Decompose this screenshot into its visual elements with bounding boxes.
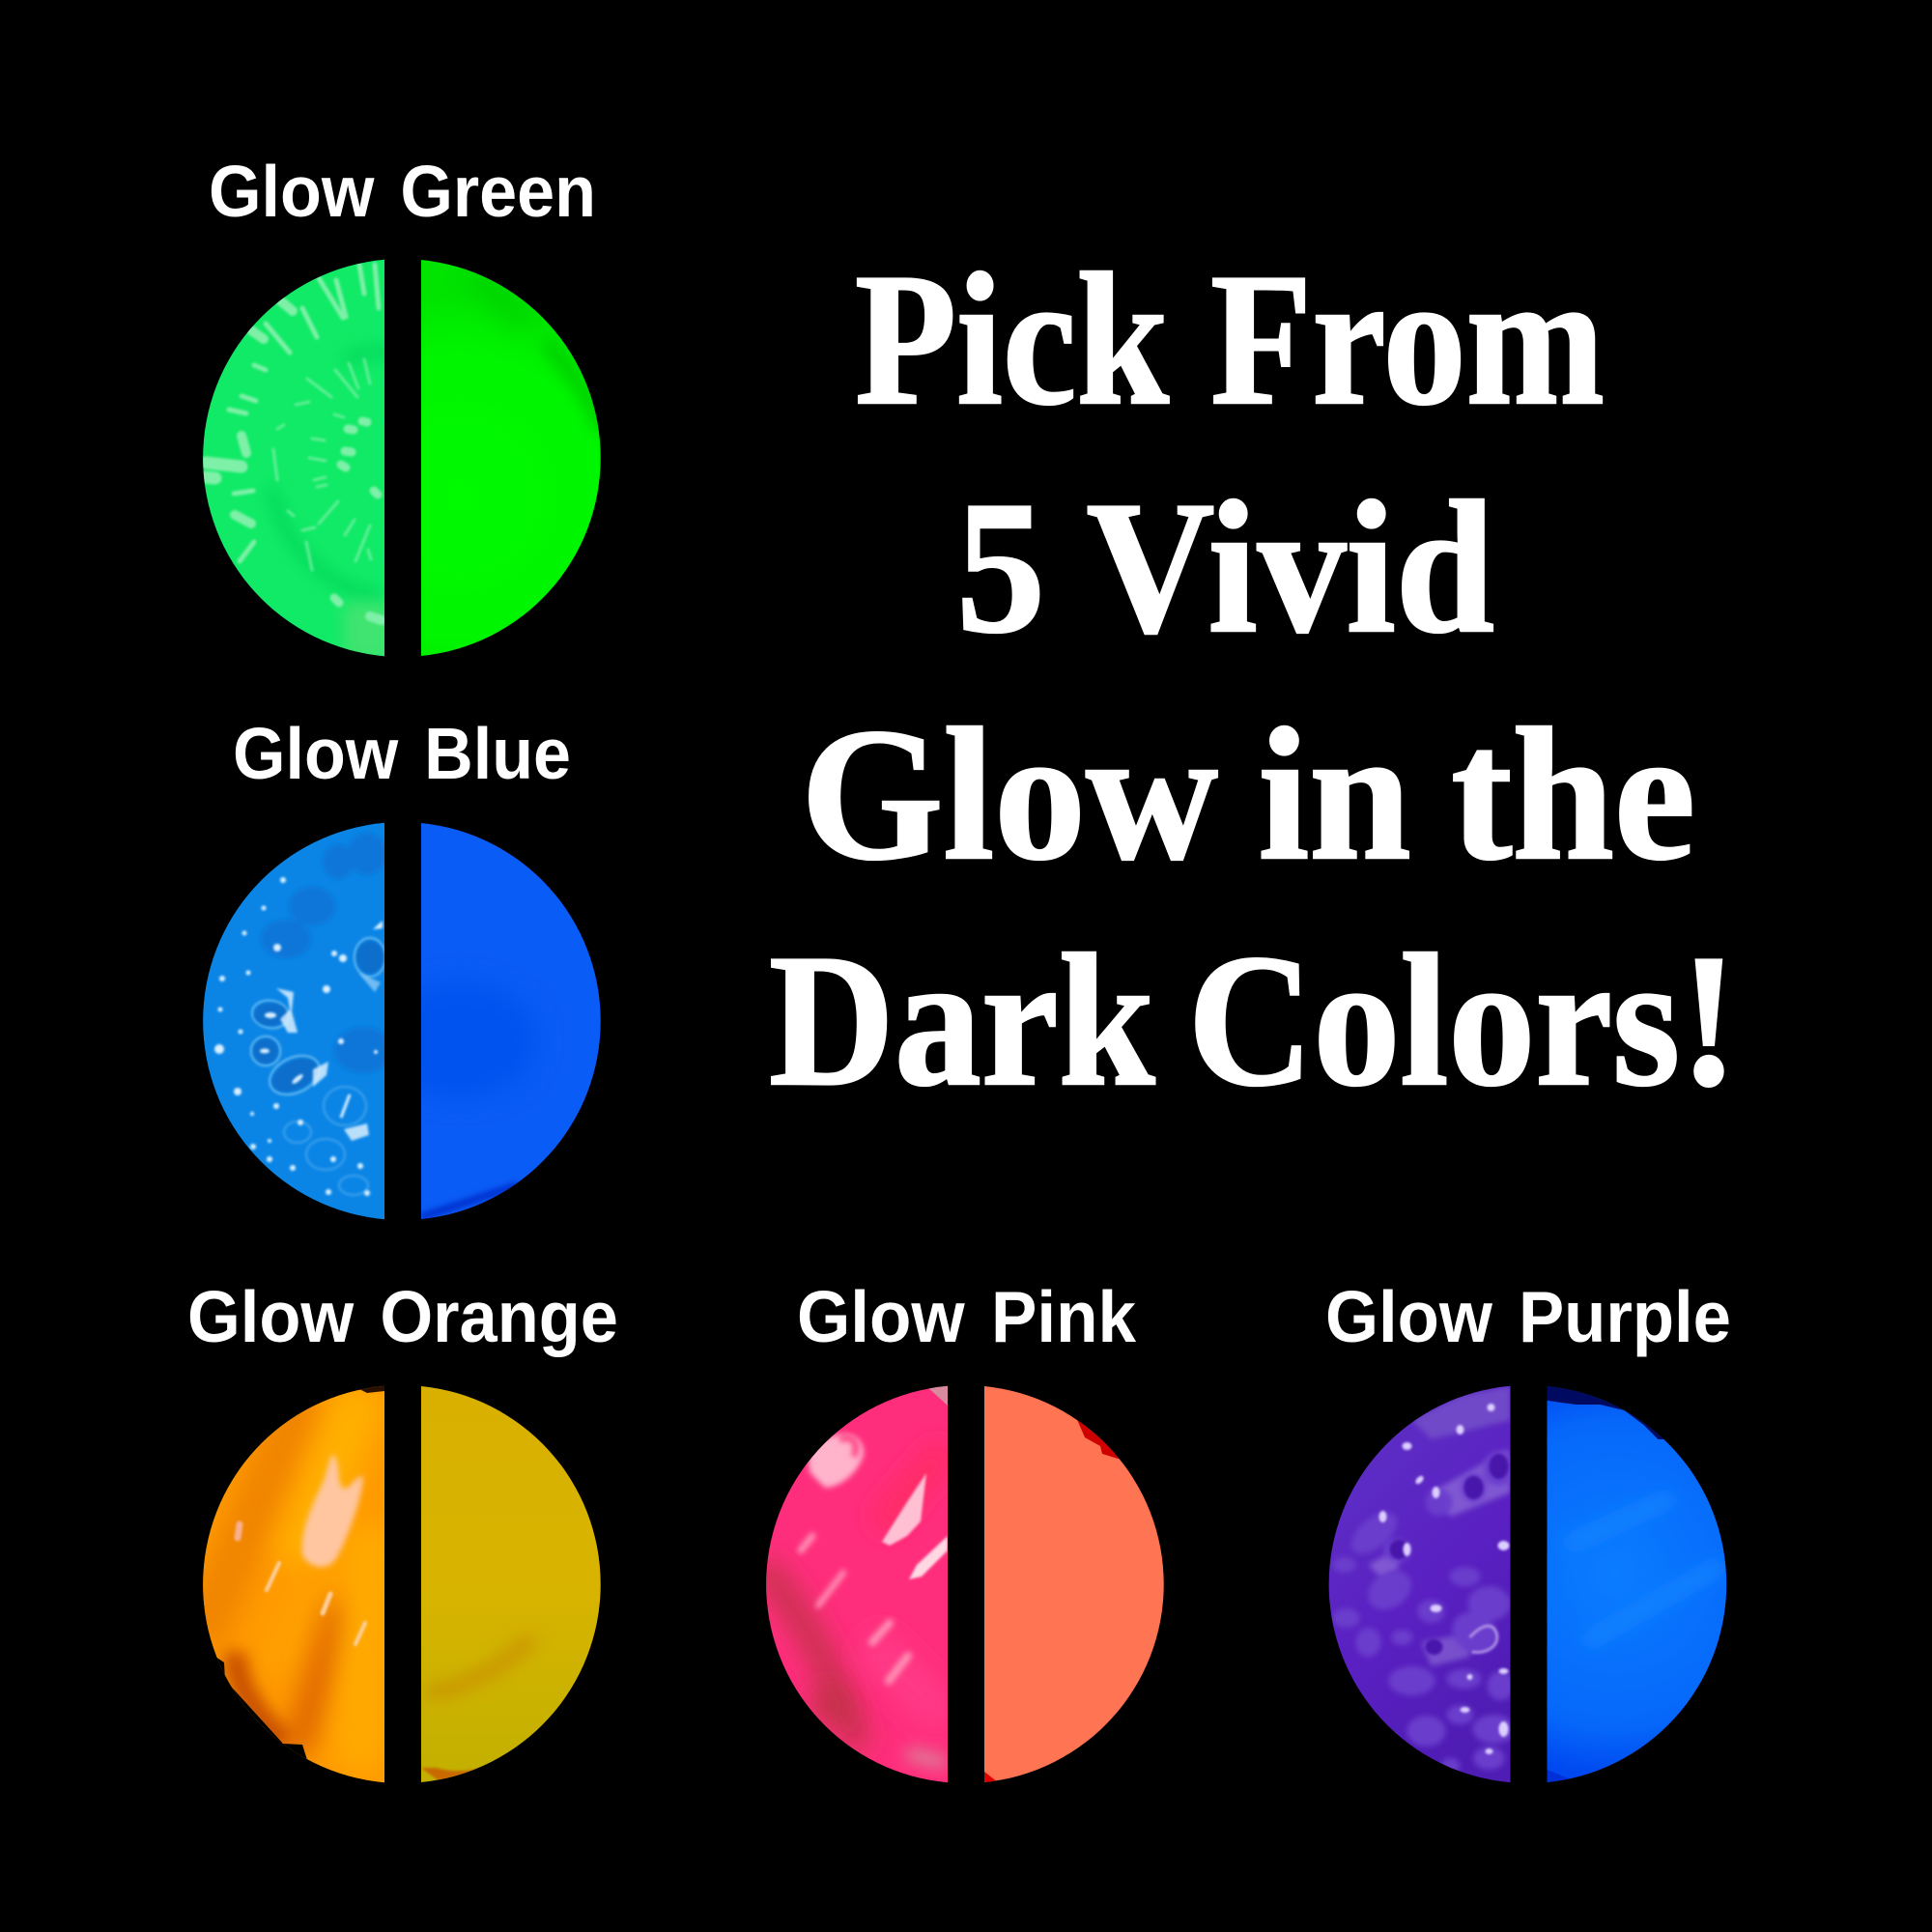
heading line: Glow in the: Glow in the — [801, 690, 1695, 899]
label: Glow Purple: Glow Purple — [1325, 1276, 1731, 1357]
orange glowing half — [416, 1381, 610, 1787]
purple glowing half — [1548, 1386, 1727, 1782]
orange daylight half — [203, 1385, 384, 1783]
blue glowing half — [421, 823, 601, 1219]
swatch: glow purple — [1325, 1377, 1735, 1787]
pink daylight half — [762, 1381, 955, 1787]
heading line: 5 Vivid: 5 Vivid — [956, 463, 1494, 672]
heading line: Pick From: Pick From — [855, 235, 1605, 444]
blue daylight half — [199, 818, 392, 1224]
label: Glow Green: Glow Green — [209, 151, 596, 232]
label: Glow Orange: Glow Orange — [187, 1276, 618, 1357]
purple daylight half — [1325, 1381, 1519, 1787]
swatch: glow orange — [194, 1381, 610, 1792]
green glowing half — [416, 255, 610, 661]
swatch: glow blue — [199, 818, 610, 1224]
heading — [769, 235, 1738, 1125]
swatch: glow green — [199, 255, 610, 661]
label: Glow Pink: Glow Pink — [797, 1276, 1136, 1357]
heading line: Dark Colors!: Dark Colors! — [769, 916, 1738, 1125]
swatch: glow pink — [762, 1381, 1173, 1787]
label: Glow Blue: Glow Blue — [233, 713, 571, 794]
pink glowing half — [980, 1381, 1173, 1787]
green daylight half — [199, 255, 392, 661]
